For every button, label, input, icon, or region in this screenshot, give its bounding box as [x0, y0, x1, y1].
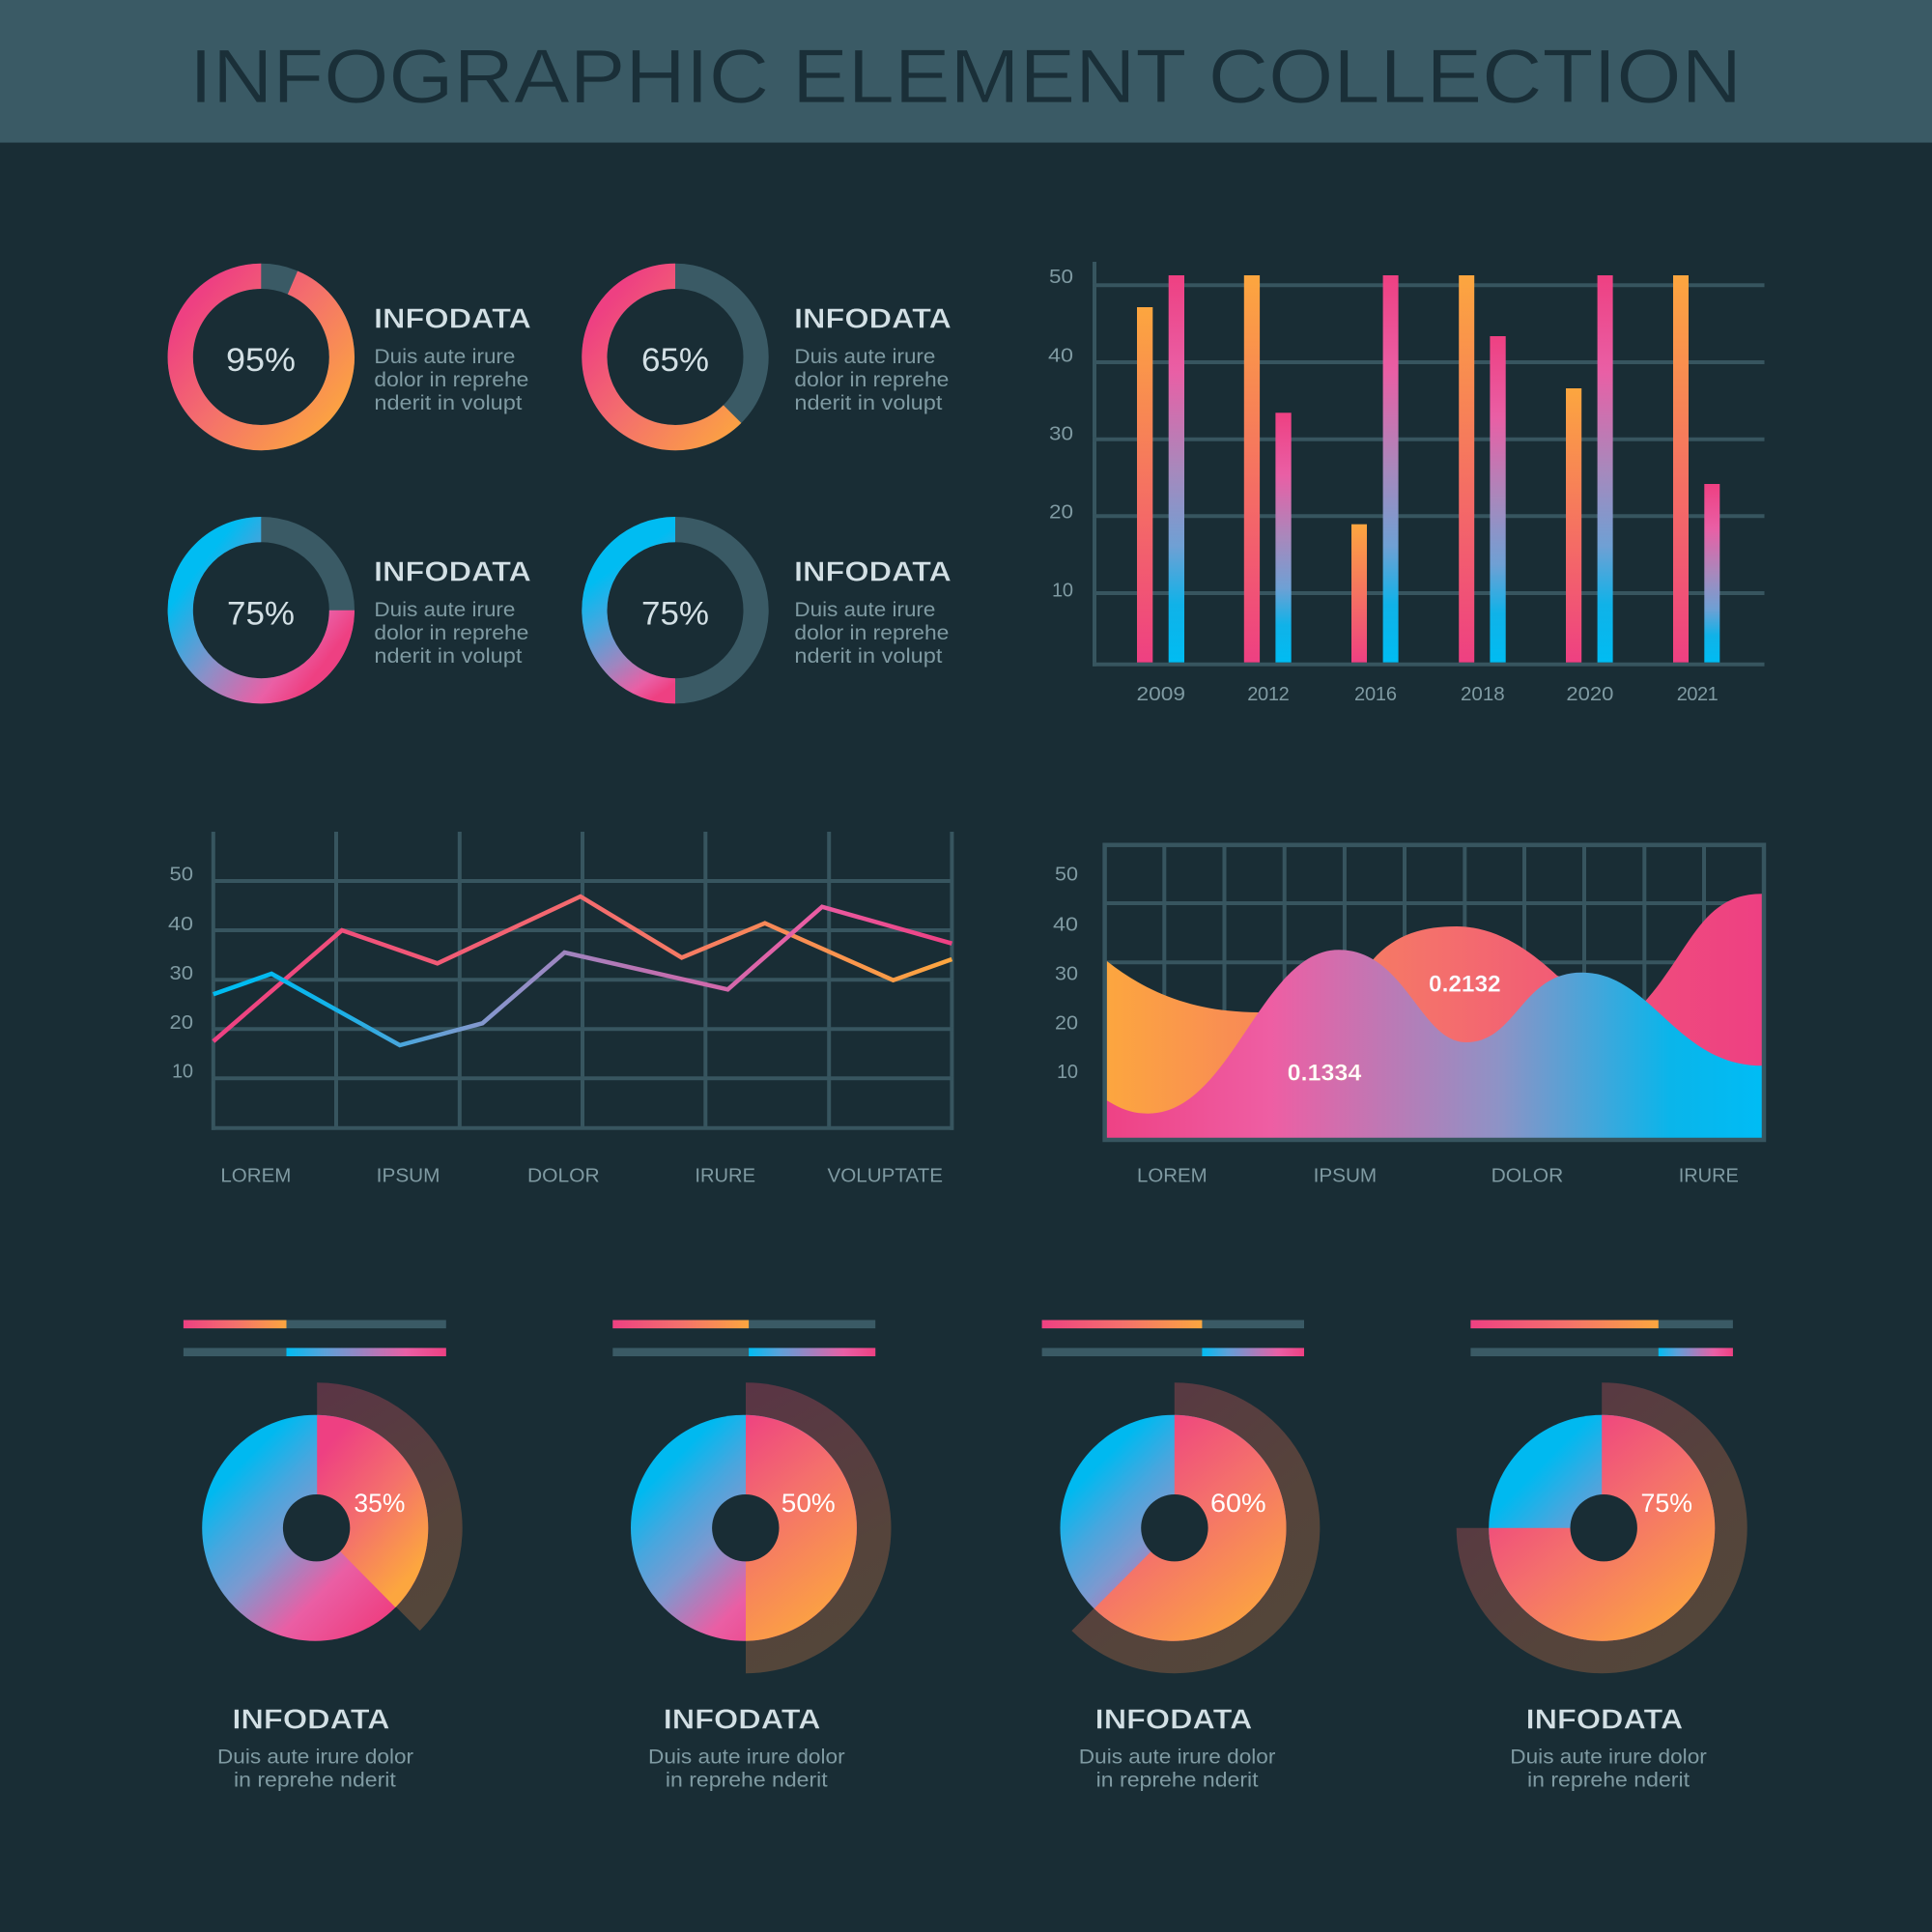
pie heading: INFODATA [232, 1704, 390, 1735]
panel: donut 75% cool [181, 529, 531, 691]
bars 2021 [1673, 275, 1719, 663]
donut description: dolor in reprehe [794, 369, 949, 391]
line chart [168, 832, 953, 1186]
progress bar bottom [1470, 1348, 1733, 1356]
donut description: nderit in volupt [794, 645, 943, 668]
area chart y axis labels: 40 [1053, 914, 1078, 935]
progress bar bottom [612, 1348, 875, 1356]
area chart frame [1105, 845, 1764, 1140]
pie description [648, 1747, 845, 1792]
progress bar bottom [184, 1348, 446, 1356]
pie description: Duis aute irure dolor [1510, 1747, 1707, 1768]
pie description: Duis aute irure dolor [217, 1747, 413, 1768]
donut value: 75% [227, 595, 295, 632]
pie heading: INFODATA [664, 1704, 821, 1735]
pie value slice [1489, 1415, 1715, 1641]
bars 2018 [1459, 275, 1506, 663]
area chart y axis labels: 30 [1055, 963, 1078, 984]
bar chart y axis labels [1048, 267, 1073, 602]
line series: pink to orange [213, 896, 952, 1041]
donut value: 65% [641, 342, 709, 379]
progress bar bottom [1042, 1348, 1304, 1356]
line chart y axis labels [168, 865, 193, 1083]
bar chart y axis labels: 50 [1049, 267, 1073, 288]
donut description: Duis aute irure [374, 346, 515, 368]
panel: pie 50% [612, 1320, 891, 1792]
pie remainder slice [1061, 1415, 1287, 1641]
progress bar top [184, 1320, 446, 1328]
area chart x axis labels: IRURE [1679, 1165, 1739, 1186]
area chart y axis labels: 10 [1057, 1062, 1078, 1083]
donut heading: INFODATA [794, 557, 952, 588]
line chart y axis labels: 50 [170, 865, 193, 886]
bar chart x axis labels: 2020 [1566, 684, 1613, 705]
donut description: nderit in volupt [794, 392, 943, 414]
donut description: Duis aute irure [794, 346, 935, 368]
pie remainder slice [1489, 1415, 1715, 1641]
pie value: 35% [354, 1489, 405, 1518]
donut description [374, 346, 528, 414]
pie hole [1141, 1494, 1208, 1561]
donut heading: INFODATA [374, 303, 531, 334]
panel: pie 75% [1457, 1320, 1747, 1792]
pie hole [1571, 1494, 1637, 1561]
pie hole [712, 1494, 779, 1561]
area series: orange to pink [1107, 894, 1762, 1138]
bar chart y axis labels: 10 [1052, 581, 1073, 602]
area chart x axis labels: DOLOR [1492, 1165, 1563, 1186]
pie remainder slice [631, 1415, 857, 1641]
line chart x axis labels: IPSUM [377, 1165, 440, 1186]
pie hole [283, 1494, 350, 1561]
donut description: dolor in reprehe [374, 622, 528, 644]
outer shadow arc [1071, 1382, 1320, 1673]
donut description: dolor in reprehe [794, 622, 949, 644]
pie heading: INFODATA [1095, 1704, 1252, 1735]
line series: cyan to pink [213, 907, 952, 1045]
area chart y axis labels: 20 [1055, 1012, 1078, 1034]
pie description: Duis aute irure dolor [648, 1747, 845, 1768]
bar chart x axis labels: 2012 [1247, 684, 1290, 705]
donut value: 75% [641, 595, 709, 632]
area chart x axis labels [1137, 1165, 1739, 1186]
pie value: 60% [1210, 1489, 1266, 1518]
line chart x axis labels: LOREM [220, 1165, 291, 1186]
outer shadow arc [746, 1382, 891, 1673]
panel: pie 35% [184, 1320, 463, 1792]
title: INFOGRAPHIC ELEMENT COLLECTION [189, 33, 1742, 119]
donut description: Duis aute irure [794, 599, 935, 621]
pie value: 75% [1640, 1489, 1692, 1518]
pie heading: INFODATA [1526, 1704, 1683, 1735]
area series: pink to cyan [1107, 950, 1762, 1138]
line chart y axis labels: 10 [172, 1062, 193, 1083]
donut description [794, 346, 949, 414]
progress bar top [1042, 1320, 1304, 1328]
progress bar top [1470, 1320, 1733, 1328]
pie description [1510, 1747, 1707, 1792]
line chart x axis labels: VOLUPTATE [827, 1165, 943, 1186]
pie description: in reprehe nderit [666, 1770, 828, 1792]
bar chart x axis labels [1136, 684, 1719, 705]
outer shadow arc [317, 1382, 463, 1631]
donut value: 95% [226, 342, 296, 379]
bar chart x axis labels: 2021 [1677, 684, 1719, 705]
pie description: in reprehe nderit [234, 1770, 396, 1792]
donut description: Duis aute irure [374, 599, 515, 621]
area chart y axis labels [1053, 865, 1078, 1083]
panel: pie 60% [1042, 1320, 1320, 1792]
pie description: in reprehe nderit [1527, 1770, 1690, 1792]
line chart y axis labels: 20 [170, 1012, 193, 1034]
donut heading: INFODATA [374, 557, 531, 588]
donut description [374, 599, 528, 668]
bars 2016 [1351, 275, 1399, 663]
pie description [217, 1747, 413, 1792]
donut description: dolor in reprehe [374, 369, 528, 391]
bar chart [1048, 262, 1764, 705]
line chart x axis labels [220, 1165, 943, 1186]
pie value slice [746, 1415, 857, 1641]
bar chart y axis labels: 30 [1049, 424, 1073, 445]
line chart y axis labels: 30 [170, 963, 193, 984]
area chart x axis labels: IPSUM [1314, 1165, 1377, 1186]
donut description [794, 599, 949, 668]
pie value slice [1094, 1415, 1287, 1641]
value label 0.1334: 0.1334 [1288, 1061, 1362, 1087]
outer shadow arc [1457, 1382, 1747, 1673]
bar chart y axis labels: 40 [1048, 346, 1073, 367]
bar chart y axis labels: 20 [1049, 502, 1073, 524]
pie remainder slice [202, 1415, 428, 1641]
panel: donut 75% half [594, 529, 952, 691]
donut description: nderit in volupt [374, 645, 523, 668]
bars 2009 [1137, 275, 1184, 663]
area chart [1053, 845, 1764, 1186]
donut heading: INFODATA [794, 303, 952, 334]
bar chart x axis labels: 2009 [1136, 684, 1185, 705]
line chart x axis labels: DOLOR [527, 1165, 600, 1186]
bar chart x axis labels: 2016 [1354, 684, 1397, 705]
pie value slice [317, 1415, 428, 1607]
line chart y axis labels: 40 [168, 914, 193, 935]
line chart x axis labels: IRURE [695, 1165, 755, 1186]
pie description: Duis aute irure dolor [1079, 1747, 1275, 1768]
bar chart x axis labels: 2018 [1461, 684, 1505, 705]
donut description: nderit in volupt [374, 392, 523, 414]
area chart x axis labels: LOREM [1137, 1165, 1208, 1186]
bars 2012 [1244, 275, 1292, 663]
pie description [1079, 1747, 1275, 1792]
panel: donut 95% [181, 276, 531, 438]
header band [0, 0, 1932, 143]
value label 0.2132: 0.2132 [1429, 972, 1501, 998]
pie description: in reprehe nderit [1096, 1770, 1259, 1792]
bars 2020 [1566, 275, 1613, 663]
pie value: 50% [781, 1489, 836, 1518]
panel: donut 65% [594, 276, 952, 438]
area chart y axis labels: 50 [1055, 865, 1078, 886]
progress bar top [612, 1320, 875, 1328]
